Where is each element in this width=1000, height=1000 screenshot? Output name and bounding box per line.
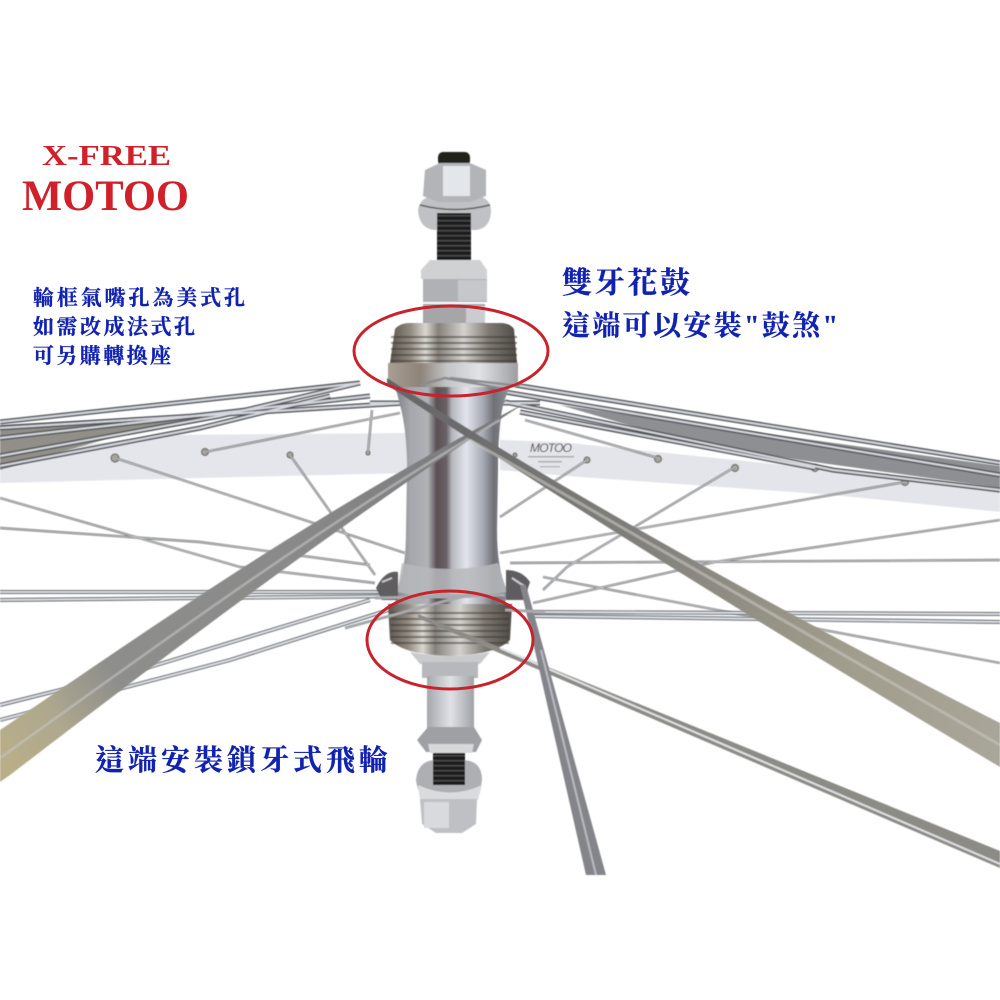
thin spokes (0, 410, 1000, 663)
wheel rim (0, 405, 1000, 512)
spoke nipples (111, 448, 908, 486)
note: valve hole: 可另購轉換座 (33, 344, 172, 368)
axle bottom: nuts and threads (416, 662, 482, 833)
silver double-line spokes (0, 592, 1000, 720)
rim brand label: MOTOO (530, 441, 572, 455)
red circle: top flange (354, 306, 548, 396)
hub body (376, 385, 530, 605)
lower threaded flange (388, 604, 512, 664)
spokes crossing lower flange (345, 593, 545, 628)
spoke: steep downward (520, 585, 606, 875)
red circle: bottom flange (367, 591, 533, 689)
note: valve hole (33, 286, 245, 368)
rim brand label (528, 441, 574, 468)
brand title: X-FREE (42, 140, 171, 172)
callout: freewheel side: 這端安裝鎖牙式飛輪 (95, 744, 388, 777)
spoke: long lower right (418, 614, 1000, 868)
upper spoke clusters (0, 383, 1000, 490)
upper threaded flange (388, 323, 520, 388)
callout: double thread hub: 雙牙花鼓 (562, 267, 690, 300)
foreground spokes (0, 378, 1000, 875)
spoke: thick lower left (0, 403, 525, 782)
spoke: thick lower right (387, 378, 1000, 767)
hub flange hardware (376, 570, 530, 600)
brand title: MOTOO (22, 173, 189, 220)
callout: double thread hub (562, 267, 838, 342)
callout: double thread hub: 這端可以安裝"鼓煞" (562, 310, 838, 342)
note: valve hole: 如需改成法式孔 (33, 315, 195, 339)
brand title (22, 140, 189, 220)
note: valve hole: 輪框氣嘴孔為美式孔 (33, 286, 245, 310)
axle top: nuts and threads (418, 152, 491, 324)
